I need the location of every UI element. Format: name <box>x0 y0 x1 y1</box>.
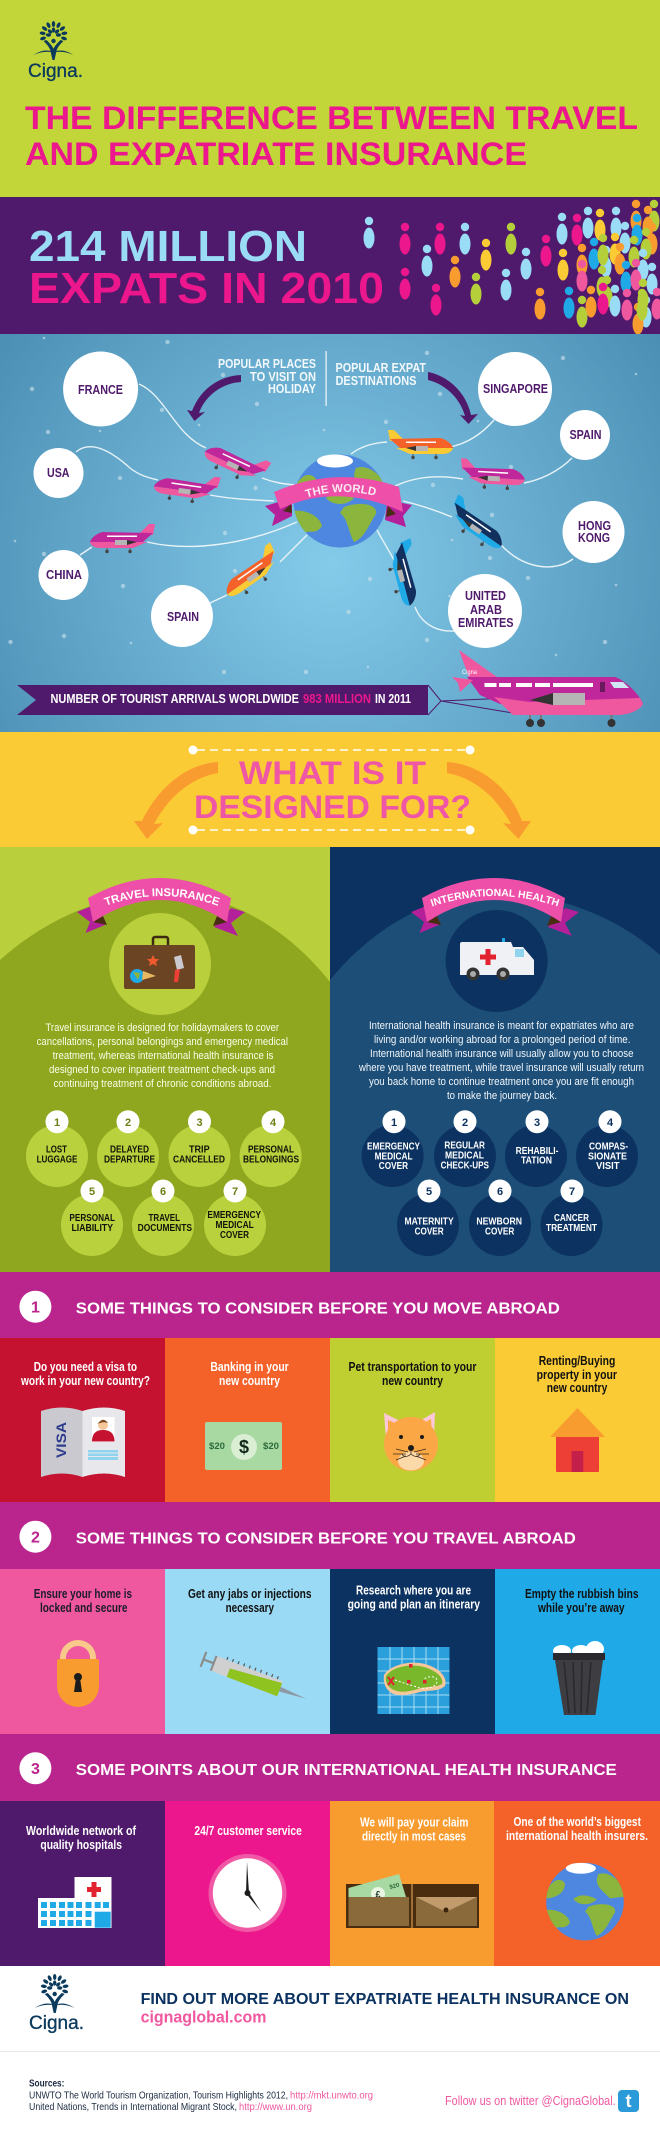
destination: Hong Kong: KONG <box>578 530 610 545</box>
list: travel cover items: COVER <box>220 1230 250 1241</box>
list: health cover items: CANCER <box>554 1213 590 1224</box>
destination: USA <box>34 448 84 498</box>
list: health cover items: VISIT <box>596 1161 620 1172</box>
icon: wallet: £ <box>375 1890 381 1900</box>
list: health cover items: COVER <box>379 1161 409 1172</box>
list: travel cover items: 2 <box>125 1117 131 1129</box>
card: hospitals <box>0 1801 165 1966</box>
list: health cover items: CHECK-UPS <box>441 1160 489 1171</box>
list: health cover items: EMERGENCY <box>367 1141 420 1152</box>
plane: France route <box>200 435 271 489</box>
list: health cover items: MATERNITY <box>404 1216 454 1227</box>
list: health cover items: REHABILI- <box>516 1146 558 1157</box>
icon: island map <box>378 1647 450 1714</box>
plane: Hong Kong route <box>442 494 512 556</box>
icon: passport <box>41 1408 125 1477</box>
list: health cover items: 1 <box>391 1117 397 1129</box>
icon: wallet <box>346 1874 479 1928</box>
card: banking: new country <box>219 1374 280 1388</box>
list: health cover items: 6 <box>497 1186 503 1198</box>
destination: Spain (expat) <box>560 410 610 460</box>
heading: section 1: SOME THINGS TO CONSIDER BEFORE YOU MOVE ABROAD <box>76 1300 560 1317</box>
card: pet transportation: new country <box>382 1374 443 1388</box>
card: itinerary: Research where you are <box>356 1584 471 1598</box>
call to action <box>141 1991 629 2027</box>
call to action: cignaglobal.com <box>141 2008 266 2027</box>
banner: tourist arrivals <box>17 685 513 715</box>
text: popular expat destinations: DESTINATIONS <box>336 374 416 388</box>
plane: UAE route <box>382 538 427 609</box>
plane: Cigna airliner <box>452 650 643 727</box>
heading: section 3: 3 <box>31 1761 40 1778</box>
list: travel cover items: 3 <box>196 1117 203 1129</box>
icon: cat <box>384 1412 438 1471</box>
destination: United Arab Emirates: EMIRATES <box>458 615 514 630</box>
text: travel insurance description: treatment, whereas international health insurance is <box>53 1050 274 1062</box>
arrow: right to international health <box>447 762 531 839</box>
card: lock your home: Ensure your home is <box>34 1587 132 1601</box>
list: health cover items: 5 <box>426 1186 432 1198</box>
heading: section 1: 1 <box>31 1300 40 1316</box>
list: health cover items: TREATMENT <box>546 1223 597 1234</box>
heading: DESIGNED FOR? <box>194 789 471 825</box>
card: visa: work in your new country? <box>20 1374 150 1388</box>
text: sources: Sources: <box>29 2078 64 2090</box>
heading: section 3: SOME POINTS ABOUT OUR INTERNATIONAL HEALTH INSURANCE <box>76 1762 617 1779</box>
heading: section 3 <box>19 1752 617 1784</box>
list: travel cover items: 6 <box>160 1186 166 1198</box>
text: sources: UNWTO The World Tourism Organization, Tourism Highlights 2012, <box>29 2090 288 2102</box>
destination: Hong Kong: HONG <box>578 518 611 533</box>
list: travel cover items: PERSONAL <box>248 1145 294 1156</box>
icon: padlock <box>57 1643 99 1707</box>
card: hospitals: Worldwide network of <box>26 1824 137 1838</box>
panel: header <box>0 0 660 197</box>
banner: tourist arrivals: NUMBER OF TOURIST ARRIVALS WORLDWIDE <box>50 691 299 706</box>
section: our international health insurance <box>0 1734 660 1966</box>
plane: Cigna airliner: Cigna <box>462 670 478 676</box>
text: popular expat destinations: POPULAR EXPAT <box>336 361 426 375</box>
text: international health description: to make the journey back. <box>447 1090 557 1102</box>
logo: Cigna footer <box>29 1974 84 2034</box>
icon: twitter <box>618 2090 639 2112</box>
card: customer service: 24/7 customer service <box>194 1824 302 1838</box>
heading: WHAT IS IT <box>239 755 426 791</box>
list: travel cover items: BELONGINGS <box>243 1155 299 1166</box>
ribbon: international health <box>411 878 579 936</box>
card: renting or buying <box>495 1338 660 1502</box>
list: travel cover items: LIABILITY <box>72 1223 113 1234</box>
list: health cover items: TATION <box>521 1156 552 1167</box>
text: sources <box>29 2078 373 2113</box>
icon: banknote: $ <box>239 1437 249 1457</box>
card: banking <box>165 1338 330 1502</box>
text: twitter follow: Follow us on twitter @CignaGlobal. <box>445 2093 616 2108</box>
panel: footer <box>0 1966 660 2134</box>
destination: Spain (holiday) <box>151 585 213 647</box>
card: itinerary: going and plan an itinerary <box>348 1598 480 1612</box>
destination: United Arab Emirates: UNITED <box>465 588 506 603</box>
destination: France <box>63 352 138 426</box>
list: travel cover items: DOCUMENTS <box>138 1223 192 1234</box>
text: international health description: living and/or working abroad for a prolonged period of time. <box>374 1034 630 1046</box>
icon: crowd of people <box>364 200 660 334</box>
panel: expats statistic <box>0 197 660 334</box>
banner: tourist arrivals: IN 2011 <box>375 691 411 706</box>
list: travel cover items: PERSONAL <box>69 1213 115 1224</box>
arrow: to expat destinations <box>428 372 478 424</box>
panel: travel insurance <box>0 847 330 1272</box>
call to action: FIND OUT MORE ABOUT EXPATRIATE HEALTH INSURANCE ON <box>141 1991 629 2008</box>
logo: Cigna footer: Cigna. <box>29 2013 84 2034</box>
plane: Spain expat route <box>459 458 526 491</box>
destination: China <box>38 550 88 600</box>
card: claims: We will pay your claim <box>360 1816 468 1830</box>
text: travel insurance description: cancellations, personal belongings and emergency medical <box>37 1036 288 1048</box>
section: before you move abroad <box>0 1272 660 1502</box>
icon: twitter: t <box>626 2091 632 2111</box>
text: popular places to visit on holiday: HOLIDAY <box>268 382 317 396</box>
icon: wallet: $20 <box>389 1883 401 1891</box>
card: jabs <box>165 1569 330 1734</box>
destination: United Arab Emirates: ARAB <box>470 602 502 617</box>
list: health cover items: 7 <box>569 1186 575 1198</box>
destination: Singapore <box>478 352 552 426</box>
list: travel cover items: 1 <box>54 1117 60 1129</box>
destination: China: CHINA <box>46 567 83 582</box>
text: popular places to visit on holiday <box>218 357 317 396</box>
text: sources: United Nations, Trends in International Migrant Stock, <box>29 2101 237 2113</box>
list: travel cover items: EMERGENCY <box>207 1210 261 1221</box>
section: before you travel abroad <box>0 1502 660 1734</box>
list: travel cover items: 7 <box>232 1186 238 1198</box>
card: rubbish bins <box>495 1569 660 1734</box>
icon: hospital <box>38 1877 112 1928</box>
card: jabs: necessary <box>226 1601 274 1615</box>
title <box>25 100 638 172</box>
card: itinerary <box>330 1569 495 1734</box>
arrow: to holiday places <box>187 375 241 421</box>
title: AND EXPATRIATE INSURANCE <box>25 136 527 172</box>
destination: United Arab Emirates <box>448 574 522 648</box>
text: popular places to visit on holiday: TO VISIT ON <box>250 370 316 384</box>
card: pet transportation: Pet transportation to your <box>348 1360 477 1374</box>
destination: Spain (holiday): SPAIN <box>167 609 199 624</box>
card: renting or buying: Renting/Buying <box>539 1354 615 1368</box>
ribbon: travel insurance: TRAVEL INSURANCE <box>104 888 220 906</box>
icon: rubbish bin <box>553 1641 605 1715</box>
card: renting or buying: property in your <box>537 1368 617 1382</box>
list: health cover items: SIONATE <box>588 1151 627 1162</box>
icon: passport: VISA <box>53 1422 69 1458</box>
card: claims: directly in most cases <box>362 1830 466 1844</box>
list: travel cover items: MEDICAL <box>216 1220 254 1231</box>
icon: globe with the world banner <box>265 454 412 548</box>
icon: clock <box>208 1854 286 1932</box>
banner: tourist arrivals: 983 MILLION <box>303 691 371 706</box>
destination: Spain (expat): SPAIN <box>570 427 602 442</box>
icon: banknote: $20 <box>263 1441 279 1451</box>
text: popular places to visit on holiday: POPULAR PLACES <box>218 357 316 371</box>
list: health cover items: 3 <box>534 1117 540 1129</box>
title: THE DIFFERENCE BETWEEN TRAVEL <box>25 100 638 136</box>
list: health cover items <box>362 1110 638 1256</box>
text: popular expat destinations <box>336 361 426 388</box>
list: health cover items: COVER <box>485 1226 515 1237</box>
icon: globe <box>546 1863 625 1941</box>
card: renting or buying: new country <box>547 1381 607 1395</box>
icon: ambulance <box>446 910 548 1012</box>
statistic: 214 million expats: EXPATS IN 2010 <box>29 264 384 313</box>
card: rubbish bins: while you’re away <box>537 1601 625 1615</box>
statistic: 214 million expats: 214 MILLION <box>29 222 307 271</box>
icon: banknote: $20 <box>209 1441 225 1451</box>
icon: banknote <box>205 1422 282 1470</box>
destination: Singapore: SINGAPORE <box>483 381 548 396</box>
list: health cover items: 4 <box>607 1117 614 1129</box>
list: travel cover items: LUGGAGE <box>37 1155 78 1166</box>
destination: USA: USA <box>47 465 70 480</box>
plane: China route <box>90 524 155 553</box>
text: international health description <box>358 1020 644 1102</box>
destination: Hong Kong <box>562 501 624 563</box>
statistic: 214 million expats <box>29 222 384 313</box>
plane: Spain holiday route <box>217 542 287 604</box>
text: travel insurance description <box>37 1022 288 1090</box>
plane: Singapore route <box>388 430 453 459</box>
list: travel cover items: 5 <box>89 1186 95 1198</box>
logo: Cigna: Cigna. <box>28 61 83 82</box>
card: lock your home <box>0 1569 165 1734</box>
heading: section 2: 2 <box>31 1530 40 1546</box>
list: travel cover items: CANCELLED <box>173 1155 225 1166</box>
logo: Cigna <box>28 21 83 82</box>
ribbon: travel insurance <box>77 878 245 936</box>
list: travel cover items <box>26 1110 302 1256</box>
heading: section 2 <box>19 1521 576 1553</box>
list: travel cover items: 4 <box>270 1117 277 1129</box>
panel: world map of destinations <box>0 334 660 732</box>
heading: section 2: SOME THINGS TO CONSIDER BEFORE YOU TRAVEL ABROAD <box>76 1530 576 1547</box>
list: health cover items: REGULAR <box>444 1141 486 1152</box>
panel: international health <box>330 847 660 1272</box>
flight routes <box>76 384 573 631</box>
text: travel insurance description: continuing treatment of chronic conditions abroad. <box>54 1078 272 1090</box>
heading: section 1 <box>19 1291 560 1323</box>
list: health cover items: NEWBORN <box>476 1216 522 1227</box>
card: visa <box>0 1338 165 1502</box>
list: health cover items: COMPAS- <box>589 1141 628 1152</box>
list: health cover items: MEDICAL <box>445 1151 484 1162</box>
icon: suitcase <box>109 913 211 1015</box>
card: rubbish bins: Empty the rubbish bins <box>525 1587 639 1601</box>
icon: house <box>550 1408 605 1472</box>
card: biggest insurers <box>494 1801 660 1966</box>
list: travel cover items: TRIP <box>189 1145 210 1156</box>
icon: syringe <box>201 1649 310 1706</box>
plane: USA route <box>152 469 221 507</box>
card: claims <box>330 1801 494 1966</box>
card: visa: Do you need a visa to <box>34 1360 137 1374</box>
list: health cover items: 2 <box>462 1117 468 1129</box>
list: travel cover items: DELAYED <box>110 1145 149 1156</box>
panel: what is it designed for <box>0 732 660 847</box>
heading <box>194 755 471 825</box>
ribbon: international health: INTERNATIONAL HEALTH <box>430 888 560 906</box>
list: health cover items: MEDICAL <box>375 1151 413 1162</box>
card: pet transportation <box>330 1338 495 1502</box>
text: international health description: you back home to continue treatment once you are fit enough <box>369 1076 634 1088</box>
text: travel insurance description: designed to cover inpatient treatment check-ups and <box>49 1064 275 1076</box>
card: hospitals: quality hospitals <box>40 1838 122 1852</box>
text: sources: http://mkt.unwto.org <box>290 2090 373 2102</box>
text: sources: http://www.un.org <box>239 2101 312 2113</box>
destination: France: FRANCE <box>78 382 123 397</box>
card: customer service <box>165 1801 330 1966</box>
card: banking: Banking in your <box>210 1360 289 1374</box>
arrow: left to travel insurance <box>134 762 218 839</box>
text: travel insurance description: Travel insurance is designed for holidaymakers to cover <box>46 1022 279 1034</box>
list: travel cover items: TRAVEL <box>148 1213 180 1224</box>
card: jabs: Get any jabs or injections <box>188 1587 312 1601</box>
list: travel cover items: DEPARTURE <box>104 1155 155 1166</box>
icon: globe with the world banner: THE WORLD <box>304 484 376 497</box>
list: travel cover items: LOST <box>46 1145 67 1156</box>
list: health cover items: COVER <box>415 1226 444 1237</box>
card: lock your home: locked and secure <box>40 1601 128 1615</box>
